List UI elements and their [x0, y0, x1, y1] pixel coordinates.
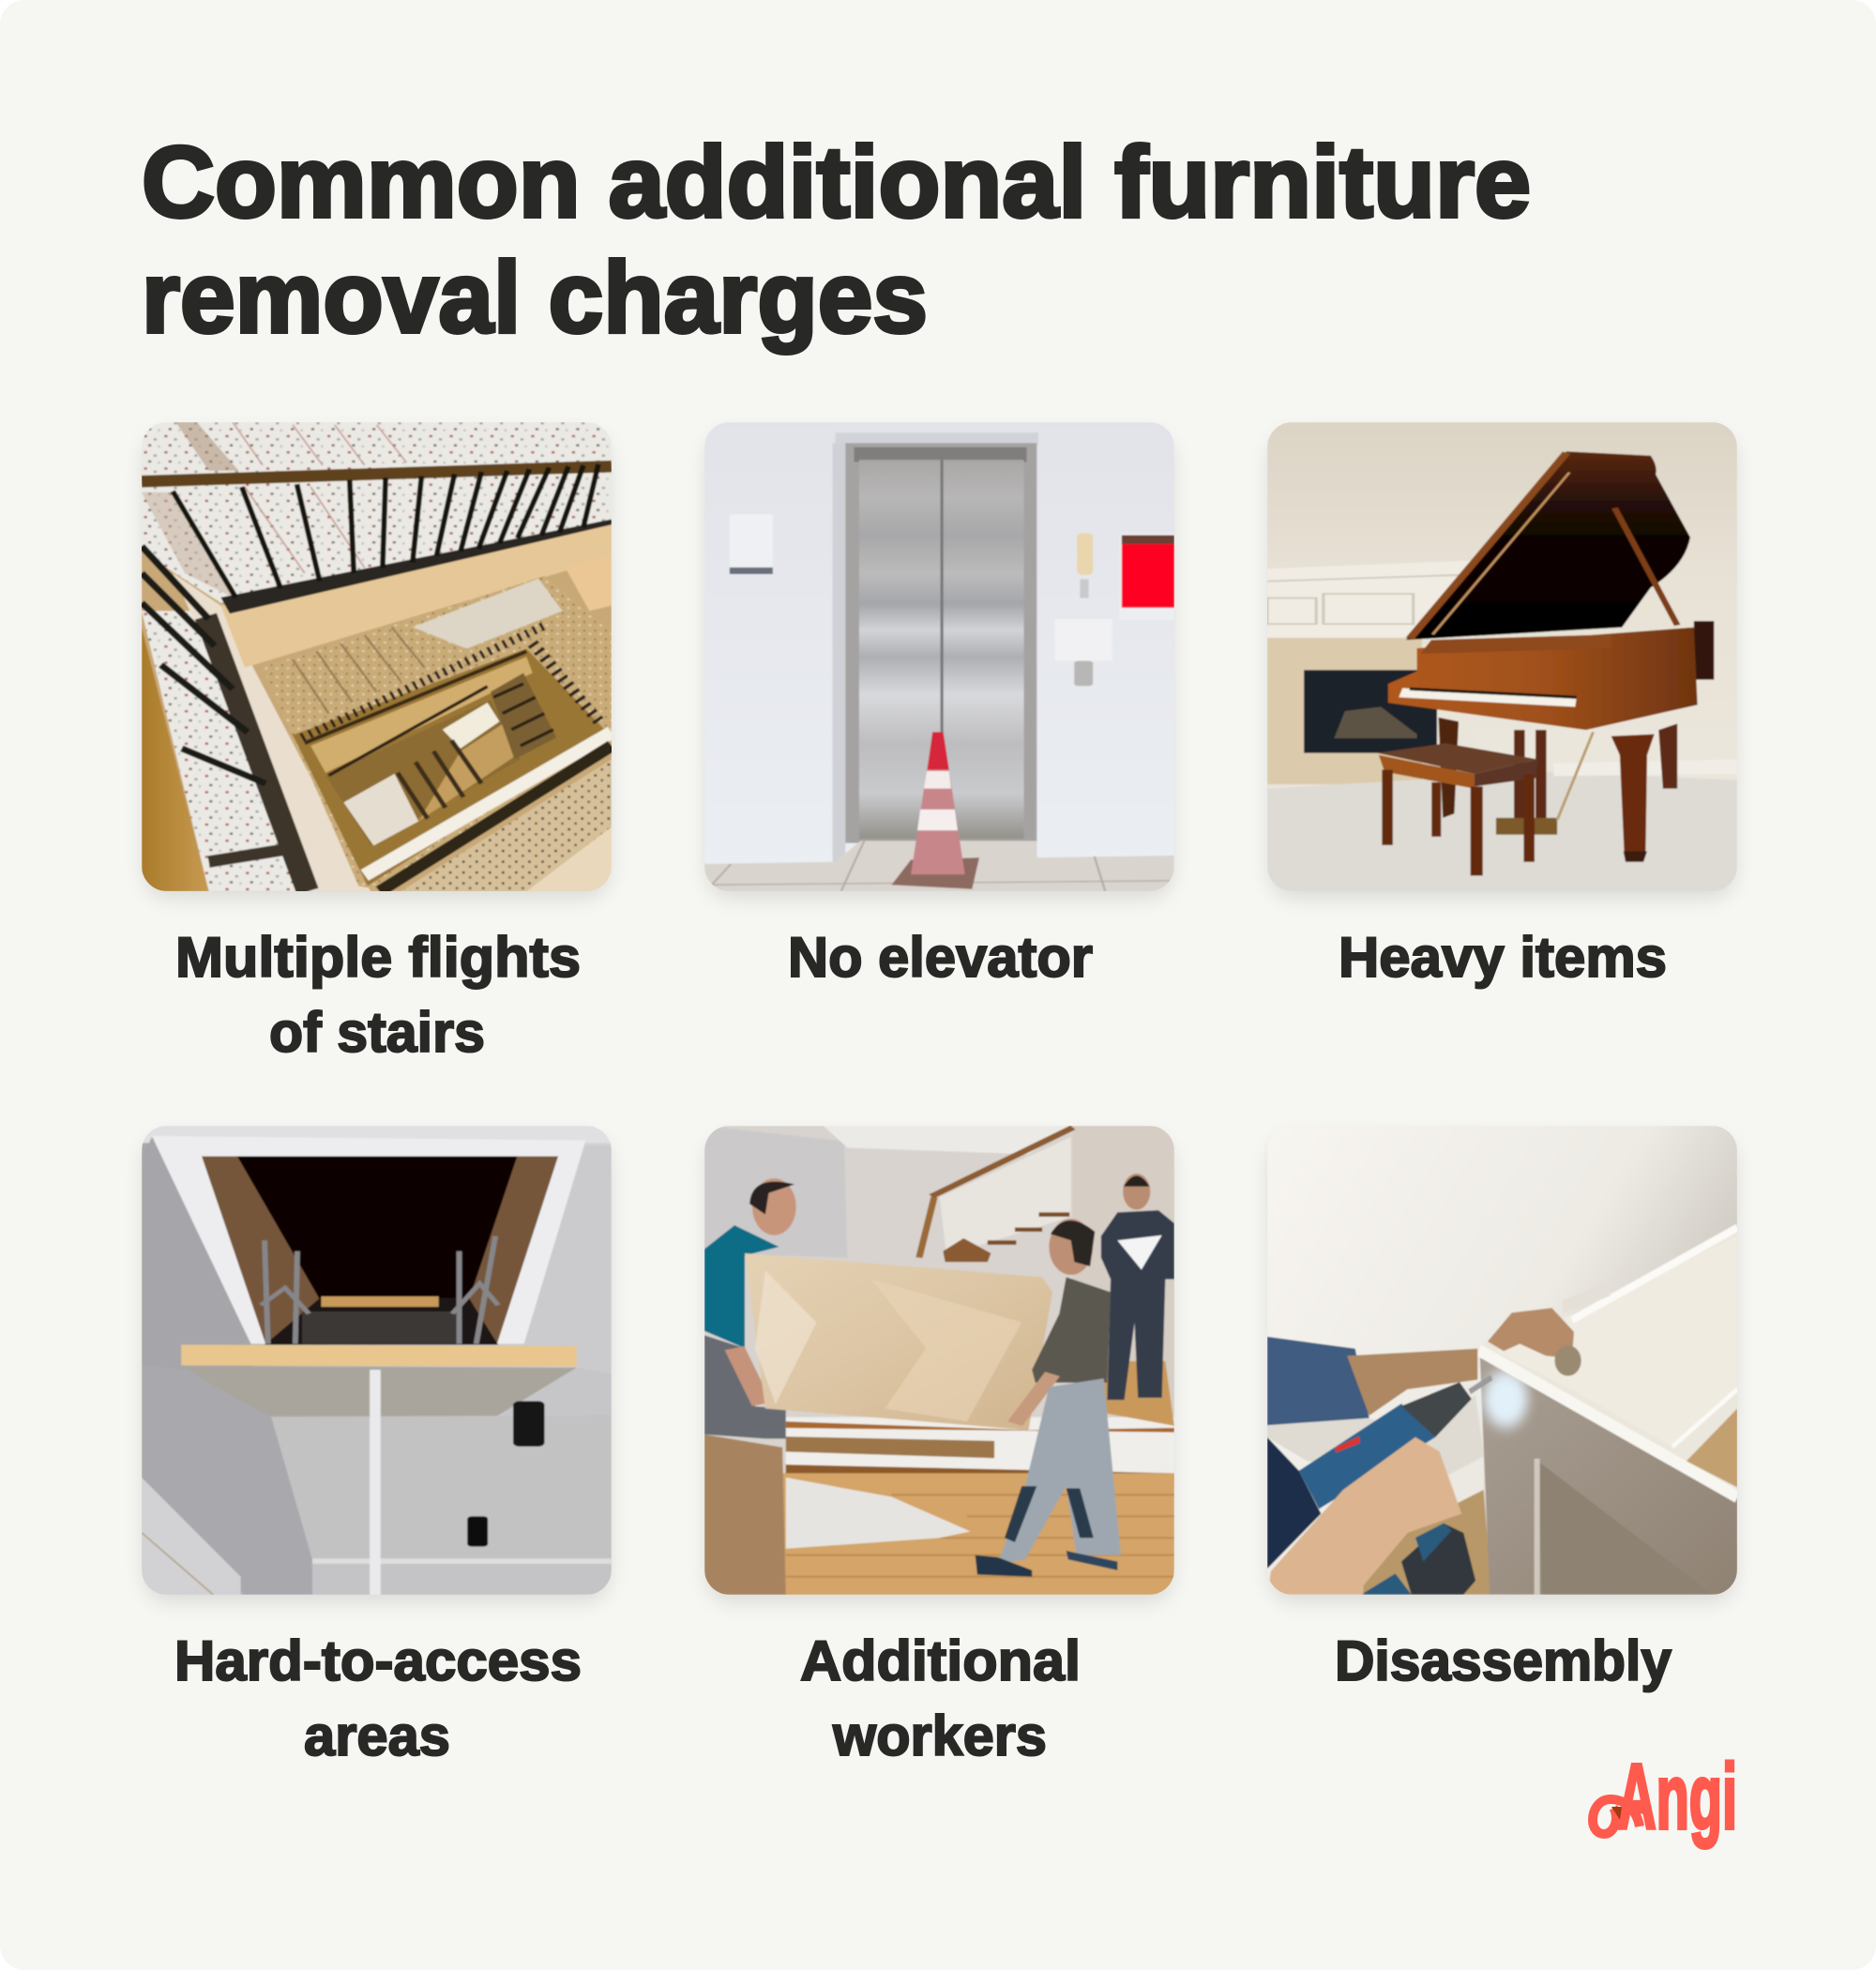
label: hard-to-access areas: Hard-to-access — [174, 1629, 582, 1692]
label: multiple flights of stairs: of stairs — [269, 1001, 485, 1064]
logo: Angi — [1593, 1745, 1737, 1848]
photo: three movers carrying wrapped furniture — [704, 1126, 1174, 1595]
photo: hands using a drill on a white cabinet — [1267, 1126, 1737, 1595]
title: removal charges — [142, 240, 928, 354]
panel: heavy items — [1267, 422, 1737, 989]
label: heavy items: Heavy items — [1339, 926, 1667, 989]
title — [142, 125, 1531, 354]
label: disassembly: Disassembly — [1335, 1629, 1672, 1692]
panel: additional workers — [704, 1126, 1174, 1767]
photo: attic hatch with folding ladder — [142, 1126, 612, 1595]
panel: multiple flights of stairs — [142, 422, 612, 1064]
label: hard-to-access areas — [174, 1629, 582, 1767]
panel: disassembly — [1267, 1126, 1737, 1692]
label: additional workers: workers — [832, 1705, 1047, 1767]
label: hard-to-access areas: areas — [304, 1705, 450, 1767]
label: multiple flights of stairs: Multiple flights — [175, 926, 581, 989]
photo: stairwell viewed from above — [142, 422, 612, 891]
photo: grand piano with bench — [1267, 422, 1737, 891]
panel: no elevator — [704, 422, 1174, 989]
title: Common additional furniture — [142, 125, 1531, 238]
label: multiple flights of stairs — [175, 926, 581, 1064]
logo: Angi: Angi — [1617, 1745, 1737, 1848]
photo: blocked elevator with traffic cone — [704, 422, 1174, 891]
label: no elevator: No elevator — [788, 926, 1093, 989]
label: additional workers: Additional — [800, 1629, 1081, 1692]
panel: hard-to-access areas — [142, 1126, 612, 1767]
label: additional workers — [800, 1629, 1081, 1767]
